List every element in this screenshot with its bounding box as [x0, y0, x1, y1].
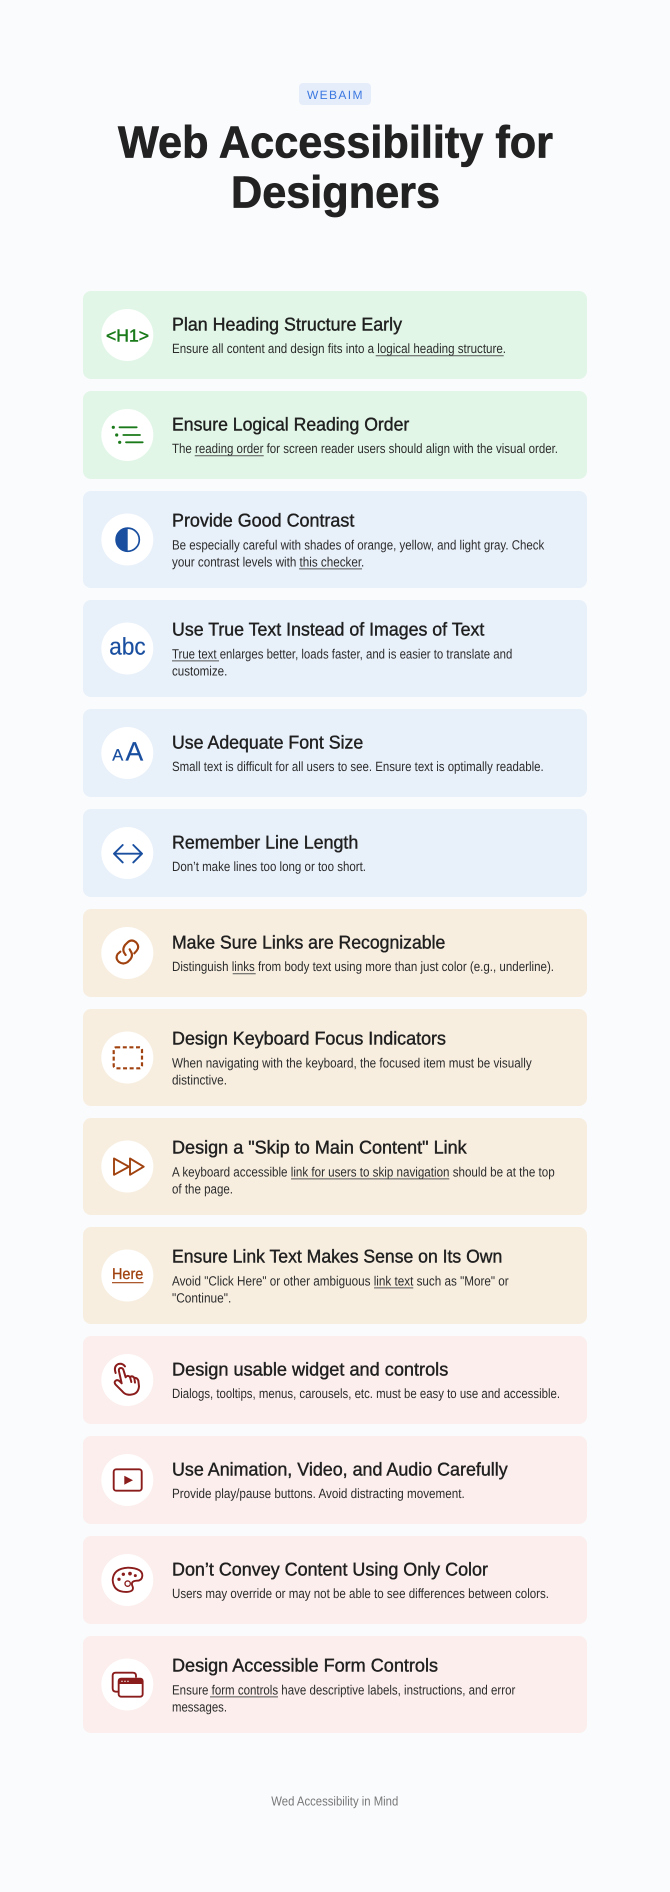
card text: [172, 1164, 555, 1196]
icon: Here link: Here: [112, 1266, 143, 1283]
icon: browser windows: [113, 1673, 143, 1697]
card text: Don’t make lines too long or too short.: [172, 859, 366, 874]
panel: Design a Skip to Main Content Link: [83, 1118, 587, 1215]
card text: your contrast levels with this checker.: [172, 554, 364, 569]
icon: double arrow: [114, 845, 142, 862]
card text: Ensure all content and design fits into a logical heading structure.: [172, 341, 506, 356]
card title: Design Accessible Form Controls: [172, 1655, 438, 1676]
card title: Remember Line Length: [172, 832, 358, 853]
icon: ordered list: [112, 426, 143, 444]
card text: of the page.: [172, 1181, 233, 1196]
card title: Use Animation, Video, and Audio Carefully: [172, 1459, 508, 1480]
icon: contrast: [116, 528, 139, 551]
card text: When navigating with the keyboard, the focused item must be visually: [172, 1055, 532, 1070]
panel: Design Keyboard Focus Indicators: [83, 1009, 587, 1106]
panel: Design Accessible Form Controls: [83, 1636, 587, 1733]
card text: Users may override or may not be able to see differences between colors.: [172, 1586, 549, 1601]
icon: video play: [114, 1469, 142, 1491]
title: Designers: [231, 167, 440, 218]
panel: Ensure Logical Reading Order: [83, 391, 587, 479]
card title: Design Keyboard Focus Indicators: [172, 1028, 446, 1049]
icon: font size: A: [112, 747, 123, 765]
icon: chain link: [117, 940, 138, 963]
icon: font size: A: [126, 737, 144, 767]
icon: skip forward: [114, 1158, 144, 1175]
card title: Don’t Convey Content Using Only Color: [172, 1559, 488, 1580]
panel: Use Adequate Font Size: [83, 709, 587, 797]
card text: Avoid "Click Here" or other ambiguous link text such as "More" or: [172, 1273, 509, 1288]
panel: Use Animation, Video, and Audio Carefully: [83, 1436, 587, 1524]
card text: [172, 1055, 532, 1087]
card title: Design usable widget and controls: [172, 1359, 448, 1380]
card title: Plan Heading Structure Early: [172, 314, 403, 335]
card text: "Continue".: [172, 1290, 231, 1305]
card title: Design a "Skip to Main Content" Link: [172, 1137, 467, 1158]
icon: H1 tag: <H1>: [106, 326, 149, 346]
panel: Plan Heading Structure Early: [83, 291, 587, 379]
card text: [172, 1682, 516, 1714]
card text: A keyboard accessible link for users to skip navigation should be at the top: [172, 1164, 555, 1179]
card title: Use True Text Instead of Images of Text: [172, 619, 484, 640]
card title: Use Adequate Font Size: [172, 732, 363, 753]
panel: Use True Text Instead of Images of Text: [83, 600, 587, 697]
card text: Small text is difficult for all users to see. Ensure text is optimally readable.: [172, 759, 544, 774]
panel: Ensure Link Text Makes Sense on Its Own: [83, 1227, 587, 1324]
card text: messages.: [172, 1699, 227, 1714]
card text: customize.: [172, 663, 227, 678]
card title: Provide Good Contrast: [172, 510, 354, 531]
card text: Ensure form controls have descriptive labels, instructions, and error: [172, 1682, 516, 1697]
icon: font size: [112, 737, 144, 767]
card text: distinctive.: [172, 1072, 227, 1087]
panel: Remember Line Length: [83, 809, 587, 897]
badge: WEBAIM: WEBAIM: [307, 88, 362, 102]
card title: Make Sure Links are Recognizable: [172, 932, 445, 953]
panel: Provide Good Contrast: [83, 491, 587, 588]
card text: Distinguish links from body text using more than just color (e.g., underline).: [172, 959, 554, 974]
card text: True text enlarges better, loads faster, and is easier to translate and: [172, 646, 512, 661]
card text: [172, 1273, 509, 1305]
card text: Provide play/pause buttons. Avoid distracting movement.: [172, 1486, 465, 1501]
card title: Ensure Link Text Makes Sense on Its Own: [172, 1246, 502, 1267]
card title: Ensure Logical Reading Order: [172, 414, 409, 435]
panel: Design usable widget and controls: [83, 1336, 587, 1424]
panel: Don't Convey Content Using Only Color: [83, 1536, 587, 1624]
title: [118, 117, 553, 218]
card text: Dialogs, tooltips, menus, carousels, etc. must be easy to use and accessible.: [172, 1386, 560, 1401]
card text: [172, 537, 545, 569]
footer: Wed Accessibility in Mind: [271, 1794, 398, 1809]
badge: WEBAIM: [299, 83, 371, 105]
panel: Make Sure Links are Recognizable: [83, 909, 587, 997]
card text: [172, 646, 512, 678]
card text: The reading order for screen reader users should align with the visual order.: [172, 441, 558, 456]
icon: palette: [113, 1568, 142, 1592]
icon: dashed focus box: [114, 1047, 142, 1068]
card text: Be especially careful with shades of orange, yellow, and light gray. Check: [172, 537, 545, 552]
title: Web Accessibility for: [118, 117, 553, 168]
icon: abc: abc: [109, 634, 146, 661]
icon: pointing hand: [115, 1364, 139, 1395]
